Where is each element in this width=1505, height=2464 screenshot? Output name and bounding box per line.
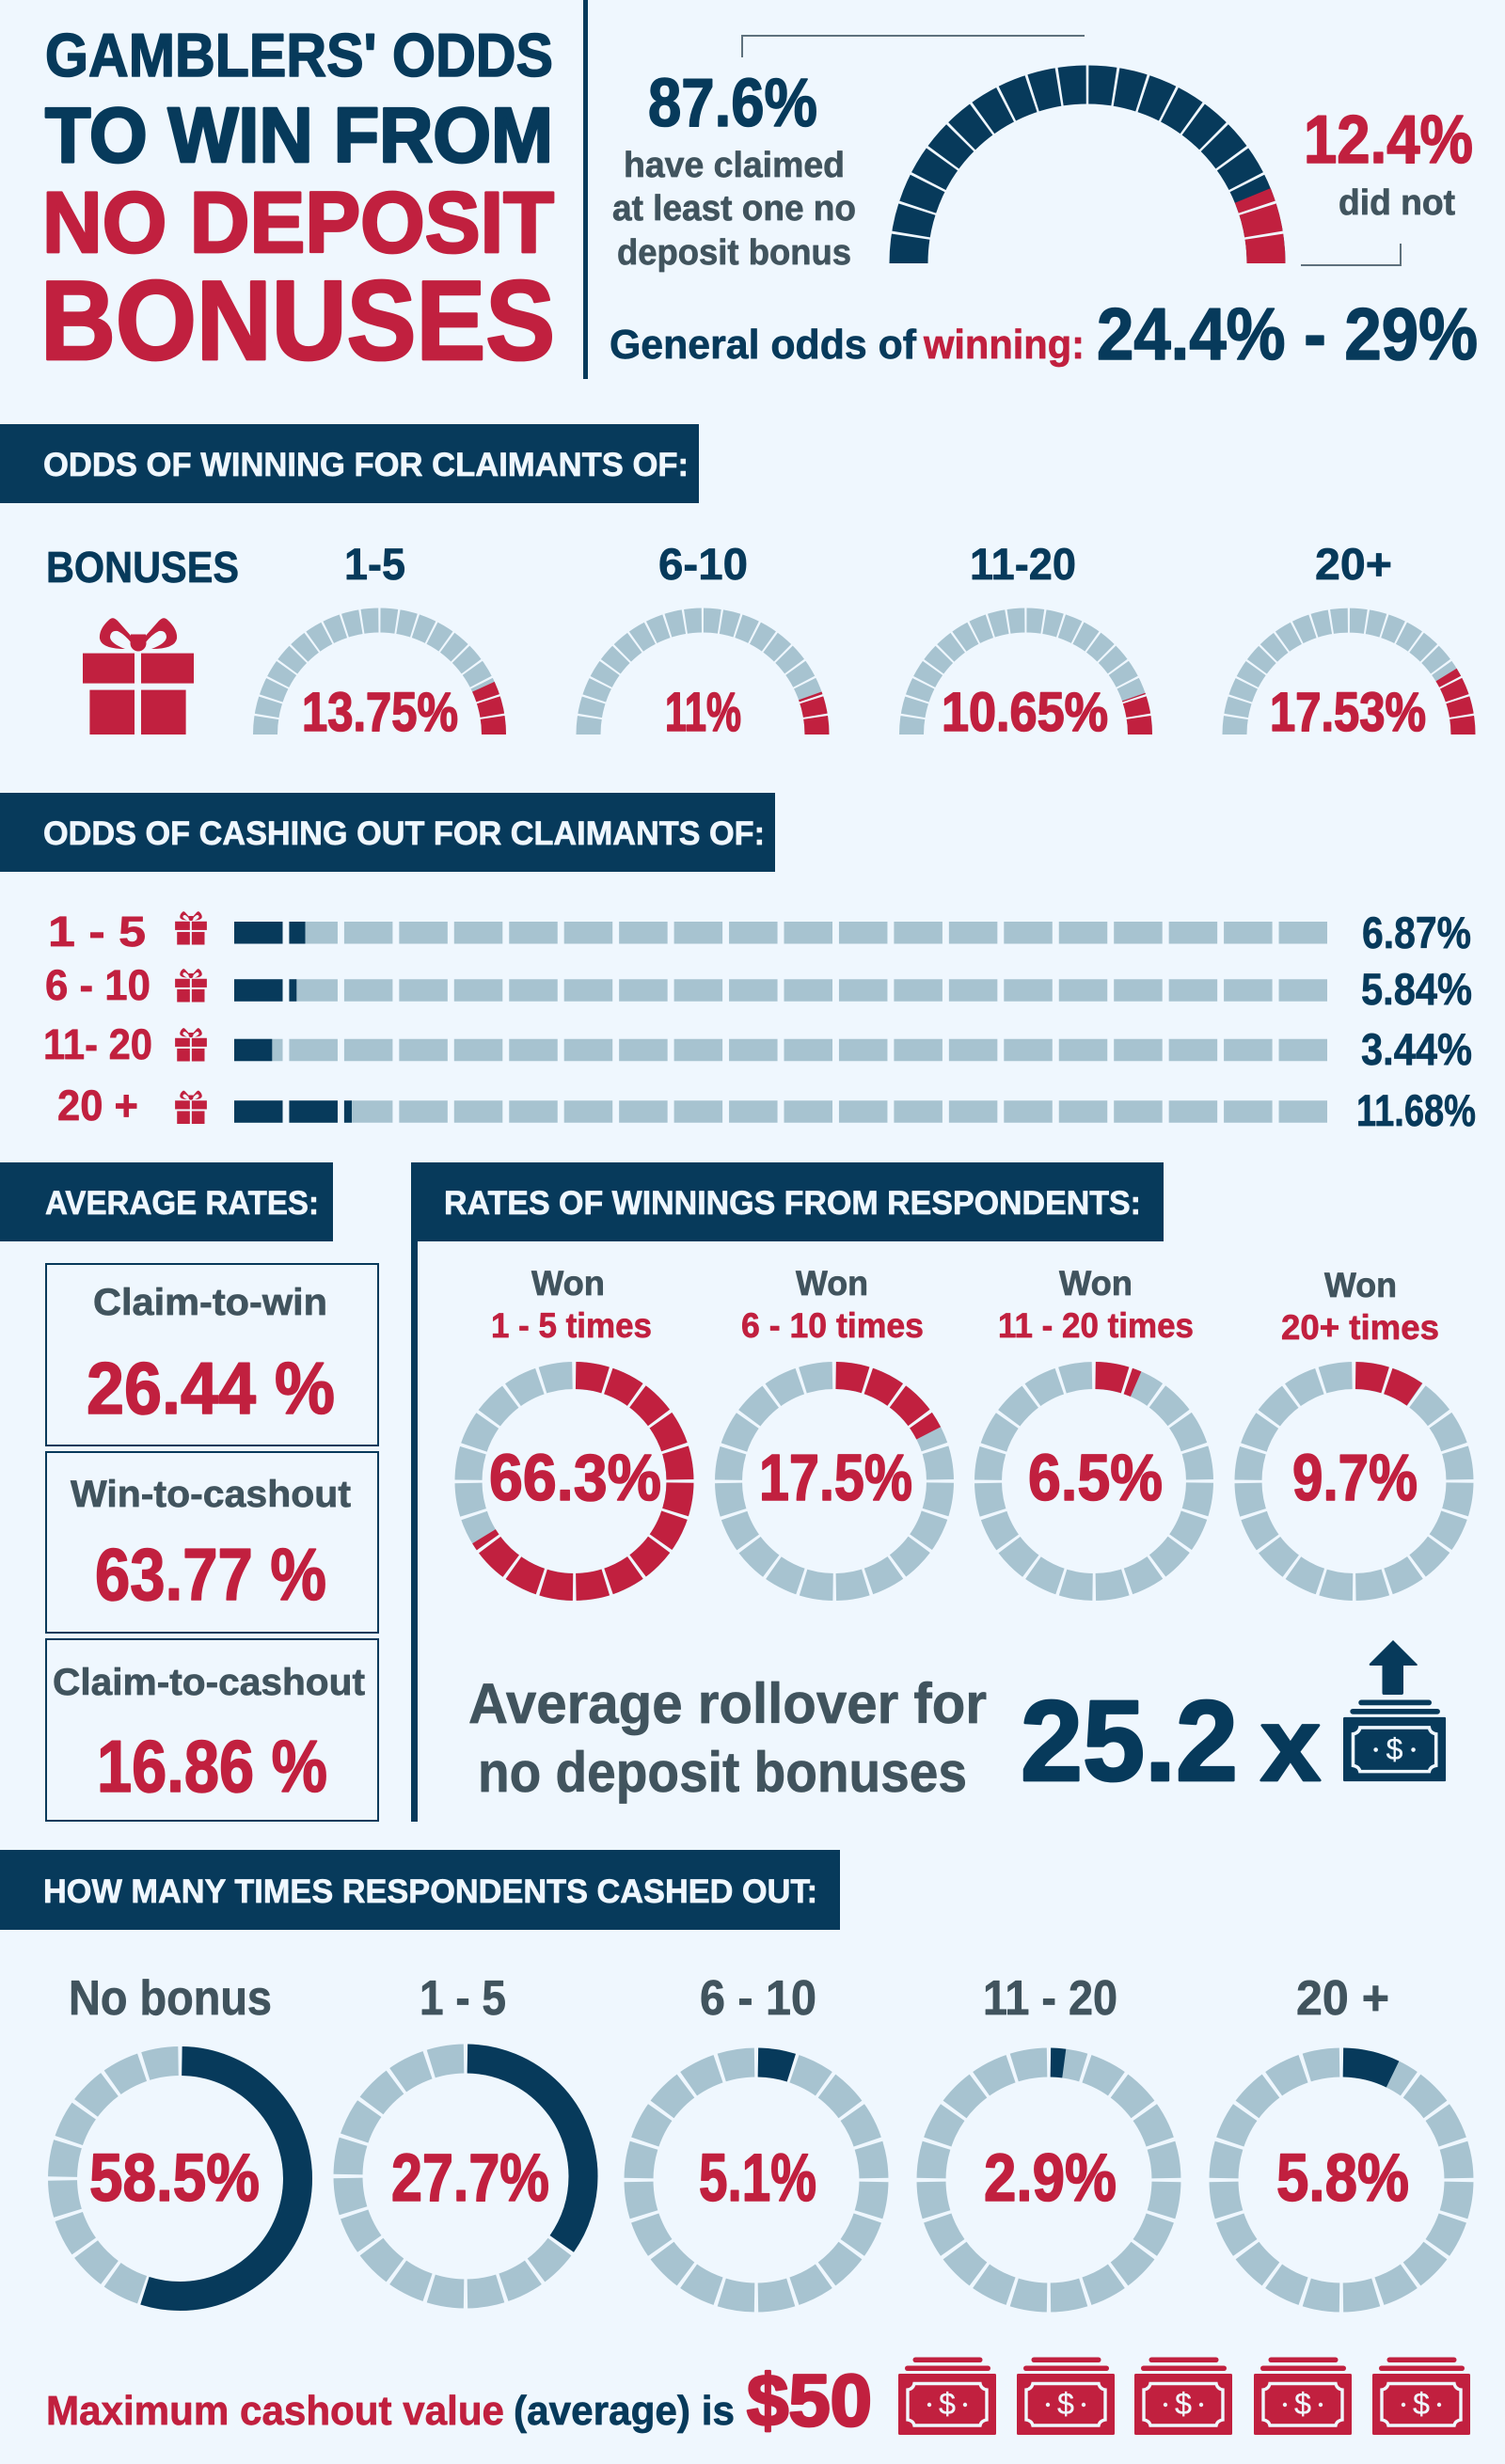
gauge: 20+ bonuses bbox=[1234, 539, 1464, 743]
header: how many times cashed out bbox=[0, 1850, 840, 1930]
donut: won 11-20 times: 11 - 20 times bbox=[998, 1306, 1194, 1345]
title bbox=[40, 21, 555, 384]
maximum cashout text: $50 bbox=[747, 2359, 872, 2441]
general odds of winning: winning: bbox=[923, 322, 1085, 368]
header: how many times cashed out: HOW MANY TIMES RESPONDENTS CASHED OUT: bbox=[43, 1873, 817, 1910]
box: claim-to-cashout: Claim-to-cashout bbox=[53, 1662, 365, 1703]
donut: won 20+ times bbox=[1248, 1266, 1460, 1587]
title: BONUSES bbox=[40, 258, 555, 384]
donut: no bonus: 58.5% bbox=[89, 2141, 260, 2216]
box: claim-to-cashout bbox=[46, 1639, 378, 1821]
donut: 1-5: 1 - 5 bbox=[420, 1971, 506, 2026]
icons: money stacks: $ bbox=[1413, 2387, 1430, 2421]
donut: 1-5: 27.7% bbox=[391, 2141, 549, 2216]
vertical divider bbox=[583, 0, 588, 379]
donut: no bonus bbox=[62, 1971, 297, 2297]
donut: 11-20: 11 - 20 bbox=[983, 1971, 1117, 2026]
top bracket bbox=[742, 36, 1085, 57]
maximum cashout text bbox=[46, 2359, 872, 2441]
bar row: 11-20: 11- 20 bbox=[43, 1020, 152, 1068]
bar row: 20+: 11.68% bbox=[1356, 1085, 1476, 1135]
header: odds of winning: ODDS OF WINNING FOR CLAIMANTS OF: bbox=[43, 447, 689, 483]
average rollover text: Average rollover for bbox=[468, 1672, 987, 1735]
donut: 20+: 5.8% bbox=[1276, 2141, 1409, 2216]
general odds of winning: 24.4% - 29% bbox=[1097, 292, 1478, 375]
donut: won 6-10 times: 17.5% bbox=[759, 1441, 912, 1514]
stat: 87.6% claimed: deposit bonus bbox=[617, 233, 851, 273]
bar row: 1-5: 6.87% bbox=[1362, 908, 1471, 957]
gauge: 1-5 bonuses: 13.75% bbox=[302, 682, 458, 743]
donut: 1-5 bbox=[348, 1971, 583, 2294]
icon: money with up arrow: $ bbox=[1386, 1732, 1403, 1766]
rollover value: x bbox=[1260, 1687, 1321, 1803]
donut: 6-10: 5.1% bbox=[699, 2141, 816, 2216]
stat: 87.6% claimed: at least one no bbox=[612, 189, 856, 229]
donut: 6-10: 6 - 10 bbox=[700, 1971, 816, 2026]
bar row: 11-20: 3.44% bbox=[1361, 1024, 1472, 1074]
icons: money stacks bbox=[898, 2357, 1470, 2435]
box: win-to-cashout: Win-to-cashout bbox=[71, 1474, 351, 1515]
box: claim-to-win bbox=[46, 1264, 378, 1445]
donut: won 20+ times: 9.7% bbox=[1292, 1441, 1418, 1514]
donut: 11-20: 2.9% bbox=[984, 2141, 1117, 2216]
rollover value: 25.2 bbox=[1021, 1677, 1238, 1805]
gauge: 11-20 bonuses bbox=[911, 539, 1140, 743]
donut: won 1-5 times: 66.3% bbox=[489, 1441, 661, 1514]
donut: 20+ bbox=[1224, 1971, 1459, 2298]
box: claim-to-win: Claim-to-win bbox=[93, 1282, 327, 1323]
icon: money with up arrow bbox=[1343, 1640, 1446, 1781]
stat: 87.6% claimed bbox=[612, 66, 856, 273]
header: odds of cashing out: ODDS OF CASHING OUT FOR CLAIMANTS OF: bbox=[43, 815, 765, 852]
title: TO WIN FROM bbox=[45, 91, 553, 179]
donut: won 20+ times: 20+ times bbox=[1281, 1308, 1439, 1347]
icons: money stacks: $ bbox=[1175, 2387, 1192, 2421]
donut: won 1-5 times: Won bbox=[531, 1264, 605, 1303]
general odds of winning: General odds of bbox=[610, 322, 916, 368]
main gauge bbox=[909, 85, 1266, 263]
gauge: 11-20 bonuses: 11-20 bbox=[970, 539, 1076, 589]
bottom bracket bbox=[1301, 244, 1401, 265]
gauge: 6-10 bonuses: 11% bbox=[665, 682, 741, 743]
maximum cashout text: (average) is bbox=[514, 2388, 735, 2434]
stat: 12.4% did not: 12.4% bbox=[1304, 103, 1473, 178]
donut: 11-20 bbox=[931, 1971, 1166, 2298]
donut: 6-10 bbox=[639, 1971, 874, 2298]
gauge: 11-20 bonuses: 10.65% bbox=[942, 682, 1108, 743]
header: rates of winnings: RATES OF WINNINGS FROM RESPONDENTS: bbox=[444, 1185, 1141, 1222]
stat: 87.6% claimed: 87.6% bbox=[648, 66, 817, 141]
bar row: 20+: 20 + bbox=[57, 1082, 138, 1129]
donut: won 11-20 times: Won bbox=[1059, 1264, 1133, 1303]
icons: money stacks: $ bbox=[1294, 2387, 1311, 2421]
gauge: 1-5 bonuses bbox=[265, 539, 494, 743]
bar row: 6-10: 5.84% bbox=[1361, 964, 1472, 1014]
donut: won 11-20 times bbox=[988, 1264, 1200, 1587]
icons: money stacks: $ bbox=[1057, 2387, 1074, 2421]
donut: won 20+ times: Won bbox=[1324, 1266, 1397, 1304]
maximum cashout text: Maximum cashout value bbox=[46, 2388, 504, 2434]
header: rates of winnings bbox=[411, 1162, 1164, 1822]
box: claim-to-win: 26.44 % bbox=[87, 1347, 335, 1429]
gauge: 6-10 bonuses: 6-10 bbox=[658, 539, 748, 589]
bar row: 1-5: 1 - 5 bbox=[48, 908, 146, 956]
header: odds of winning bbox=[0, 424, 699, 503]
bar row: 6-10 bbox=[45, 961, 1472, 1014]
general odds of winning bbox=[610, 292, 1478, 375]
bar row: 1-5 bbox=[48, 908, 1471, 957]
stat: 87.6% claimed: have claimed bbox=[624, 146, 845, 185]
header: odds of cashing out bbox=[0, 793, 775, 872]
box: claim-to-cashout: 16.86 % bbox=[97, 1725, 327, 1808]
stat: 12.4% did not bbox=[1304, 103, 1473, 223]
gauge: 20+ bonuses: 20+ bbox=[1315, 539, 1392, 589]
average rollover text bbox=[468, 1672, 987, 1804]
title: GAMBLERS' ODDS bbox=[45, 21, 553, 89]
donut: no bonus: No bonus bbox=[69, 1971, 272, 2026]
bar row: 20+ bbox=[57, 1082, 1476, 1135]
label: bonuses: BONUSES bbox=[46, 543, 239, 592]
donut: won 6-10 times bbox=[728, 1264, 941, 1587]
icon: gift bbox=[83, 618, 194, 734]
icons: money stacks: $ bbox=[939, 2387, 956, 2421]
title: NO DEPOSIT bbox=[42, 175, 554, 271]
donut: 20+: 20 + bbox=[1296, 1971, 1389, 2026]
stat: 12.4% did not: did not bbox=[1339, 183, 1455, 223]
donut: won 1-5 times bbox=[468, 1264, 680, 1587]
gauge: 20+ bonuses: 17.53% bbox=[1270, 682, 1426, 743]
donut: won 11-20 times: 6.5% bbox=[1028, 1441, 1163, 1514]
box: win-to-cashout: 63.77 % bbox=[95, 1533, 326, 1616]
box: win-to-cashout bbox=[46, 1452, 378, 1633]
donut: won 6-10 times: 6 - 10 times bbox=[741, 1306, 924, 1345]
bar row: 6-10: 6 - 10 bbox=[45, 961, 150, 1009]
bar row: 11-20 bbox=[43, 1020, 1472, 1074]
header: average rates bbox=[0, 1162, 333, 1241]
gauge: 1-5 bonuses: 1-5 bbox=[344, 539, 405, 589]
average rollover text: no deposit bonuses bbox=[478, 1741, 967, 1804]
donut: won 6-10 times: Won bbox=[796, 1264, 868, 1303]
header: average rates: AVERAGE RATES: bbox=[45, 1185, 319, 1222]
donut: won 1-5 times: 1 - 5 times bbox=[491, 1306, 652, 1345]
gauge: 6-10 bonuses bbox=[589, 539, 816, 743]
